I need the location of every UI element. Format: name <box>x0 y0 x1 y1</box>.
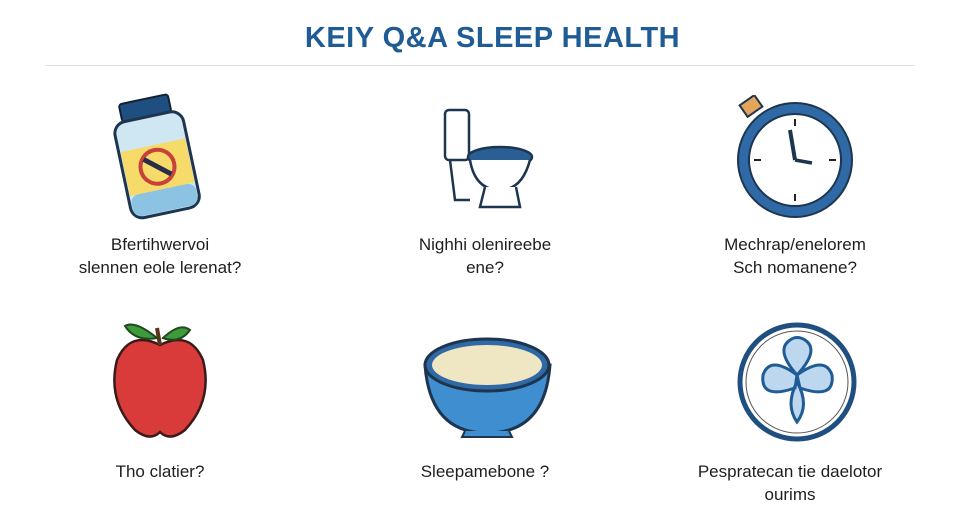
text: q2 <box>419 235 551 277</box>
text: q6: Pespratecan tie daelotor <box>698 462 882 481</box>
icon: toilet <box>444 108 534 208</box>
text: q6 <box>698 462 882 504</box>
icon: ribbon emblem <box>738 322 856 442</box>
text: q5: Sleepamebone ? <box>421 462 549 481</box>
text: q3: Sch nomanene? <box>733 258 857 277</box>
text: q4: Tho clatier? <box>116 462 204 481</box>
text: q1 <box>79 235 241 277</box>
icon: medicine jar <box>113 94 201 220</box>
text: q3 <box>724 235 866 277</box>
text: q2: ene? <box>466 258 504 277</box>
title: KEIY Q&A SLEEP HEALTH <box>305 22 680 54</box>
text: q2: Nighhi olenireebe <box>419 235 551 254</box>
icon: bowl <box>423 338 552 438</box>
icon: apple <box>113 324 207 438</box>
text: q1: Bfertihwervoi <box>111 235 209 254</box>
text: q6: ourims <box>764 485 816 504</box>
text: q1: slennen eole lerenat? <box>79 258 241 277</box>
icon: clock <box>737 95 853 218</box>
text: q3: Mechrap/enelorem <box>724 235 866 254</box>
